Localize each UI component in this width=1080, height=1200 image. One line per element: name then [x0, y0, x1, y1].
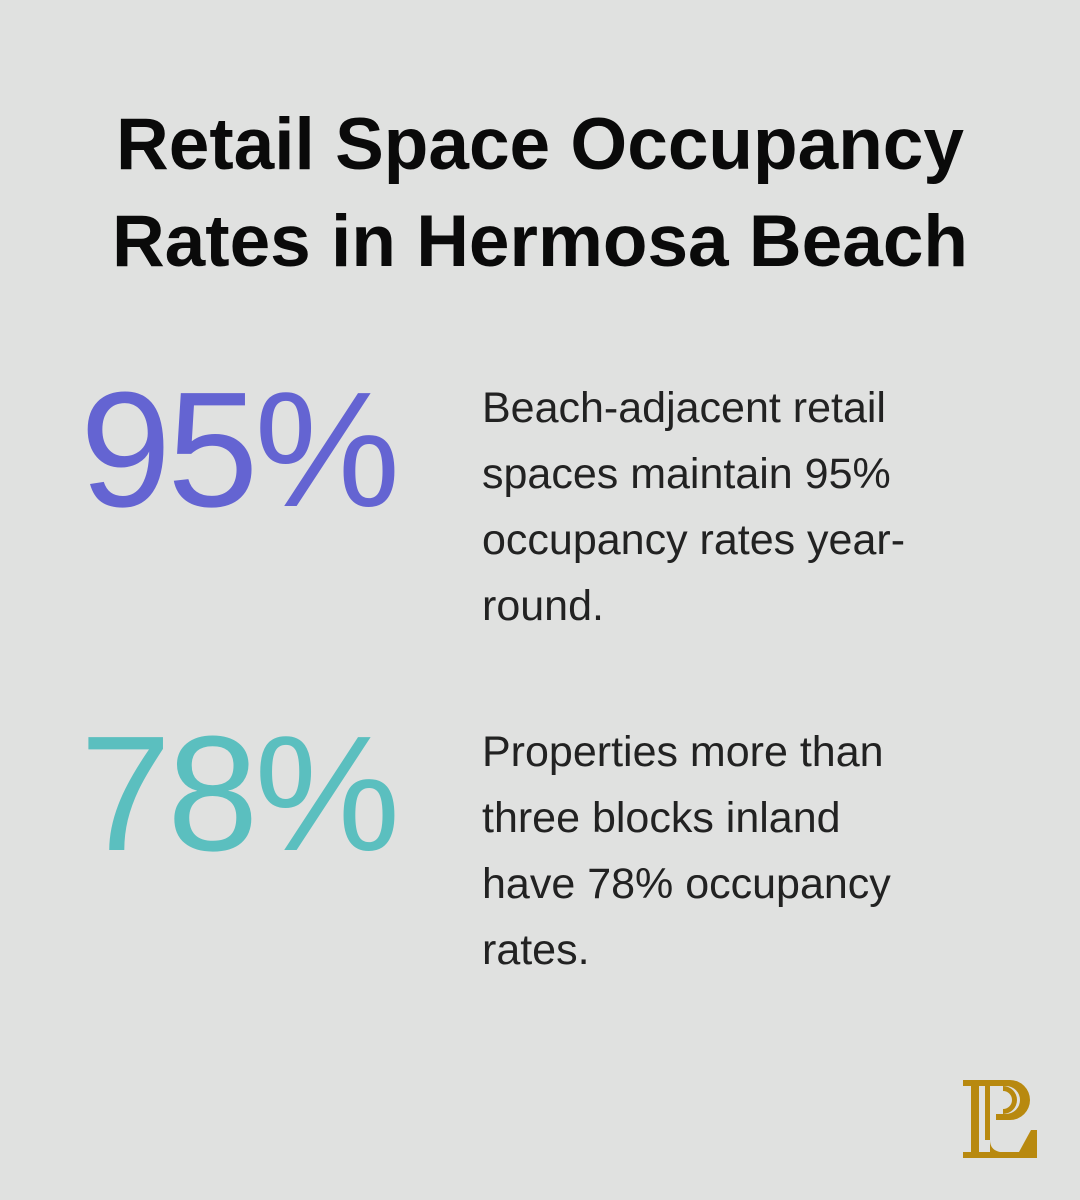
title: [112, 104, 968, 282]
title: Rates in Hermosa Beach: [112, 201, 968, 282]
text: beach-adjacent: Beach-adjacent retail spaces maintain 95% occupancy rates year-round.: [482, 384, 905, 630]
text: inland: Properties more than three blocks inland have 78% occupancy rates.: [482, 728, 891, 974]
title: Retail Space Occupancy: [116, 104, 964, 185]
stat: 95%: 95%: [80, 358, 396, 541]
icon: logo: [963, 1080, 1037, 1158]
stat: 78%: 78%: [80, 702, 396, 885]
